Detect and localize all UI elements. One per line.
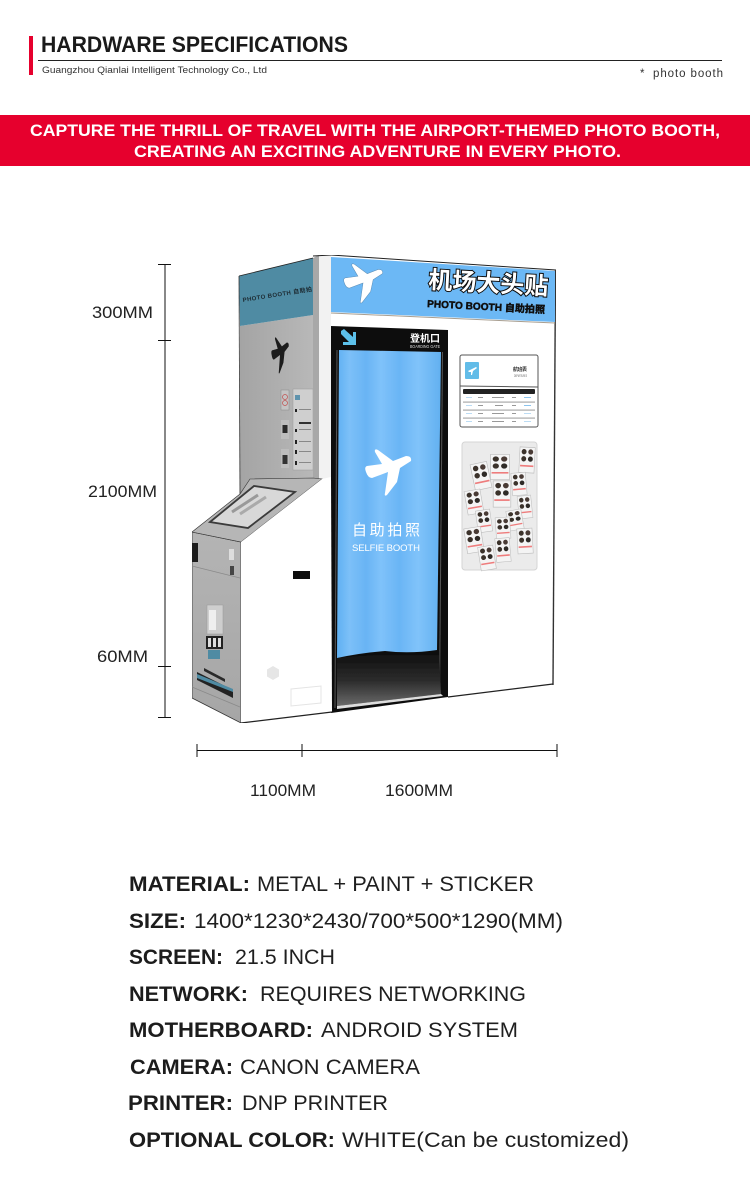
spec: printer: DNP PRINTER <box>242 1092 388 1115</box>
gate label: 登机口 <box>410 332 440 345</box>
sign subtitle: PHOTO BOOTH 自助拍照 <box>427 297 545 316</box>
sign title: 机场大头贴 <box>428 260 549 302</box>
board title: 航班表 <box>513 366 527 373</box>
spec: motherboard <box>129 1019 518 1042</box>
banner line 1: CAPTURE THE THRILL OF TRAVEL WITH THE AIRPORT-THEMED PHOTO BOOTH, <box>30 121 720 140</box>
kiosk label <box>291 686 321 706</box>
gate sublabel: BOARDING GATE <box>410 344 440 349</box>
board subtitle: DEPARTURES <box>514 374 527 378</box>
main booth front <box>331 255 556 713</box>
dimension label: 1100MM: 1100MM <box>250 781 316 800</box>
spec: motherboard: ANDROID SYSTEM <box>321 1019 518 1042</box>
curtain subtitle: SELFIE BOOTH <box>352 543 420 554</box>
spec: motherboard: MOTHERBOARD: <box>129 1019 313 1042</box>
company name: Guangzhou Qianlai Intelligent Technology Co., Ltd <box>42 65 267 75</box>
dimension label: 300MM: 300MM <box>92 303 153 322</box>
icon: black plane on side panel <box>271 337 289 373</box>
spec: optional color: WHITE(Can be customized) <box>342 1129 629 1152</box>
curtain title: 自助拍照 <box>352 522 420 539</box>
photo booth illustration <box>192 255 556 723</box>
door floor <box>337 650 441 706</box>
curtain <box>337 350 441 658</box>
spec: material: METAL + PAINT + STICKER <box>257 873 534 896</box>
spec: size: 1400*1230*2430/700*500*1290(MM) <box>194 910 563 933</box>
dimension label: 60MM: 60MM <box>97 647 148 666</box>
pillar <box>313 255 331 480</box>
spec: printer <box>128 1092 388 1115</box>
height dimension line <box>158 264 171 718</box>
width dimension line <box>197 744 557 757</box>
door frame <box>331 326 448 713</box>
side panel stickers <box>281 389 313 470</box>
heading: HARDWARE SPECIFICATIONS <box>41 32 348 57</box>
blue header sign <box>331 257 555 322</box>
side panel text: PHOTO BOOTH 自助拍 <box>242 285 312 304</box>
spec: material <box>129 873 534 896</box>
header: hardware specifications <box>29 32 723 80</box>
kiosk logo <box>267 666 279 680</box>
sample photo strips <box>464 447 535 571</box>
spec: camera: CAMERA: <box>130 1056 233 1079</box>
icon: header plane <box>344 264 383 303</box>
boarding gate door <box>331 326 448 713</box>
product tag: photo booth <box>653 68 723 80</box>
spec: camera: CANON CAMERA <box>240 1056 420 1079</box>
kiosk side details <box>192 543 240 707</box>
kiosk <box>192 477 332 723</box>
booth side panel <box>239 258 313 496</box>
icon: blue plane tile <box>465 362 479 379</box>
spec: optional color <box>129 1129 629 1152</box>
kiosk left face <box>192 532 241 723</box>
spec: optional color: OPTIONAL COLOR: <box>129 1129 335 1152</box>
spec: network: NETWORK: <box>129 983 248 1006</box>
spec: printer: PRINTER: <box>128 1092 233 1115</box>
spec: network <box>129 983 526 1006</box>
flight information board <box>460 355 538 427</box>
specification list <box>128 873 629 1152</box>
spec: size: SIZE: <box>129 910 186 933</box>
spec: screen <box>129 946 335 969</box>
red banner <box>0 115 750 166</box>
kiosk card slot <box>293 571 310 579</box>
icon: arrow <box>341 329 356 345</box>
photo display board <box>462 442 537 571</box>
spec: screen: SCREEN: <box>129 946 223 969</box>
icon: curtain plane <box>365 449 411 496</box>
spec: camera <box>130 1056 420 1079</box>
kiosk touch screen <box>210 486 295 528</box>
kiosk top slope <box>192 478 322 542</box>
board table <box>463 389 535 422</box>
red accent bar <box>29 36 33 75</box>
dimension label: 1600MM: 1600MM <box>385 781 453 800</box>
kiosk white front <box>241 477 332 723</box>
dimension label: 2100MM: 2100MM <box>88 482 157 501</box>
spec: material: MATERIAL: <box>129 873 250 896</box>
spec: screen: 21.5 INCH <box>235 946 335 969</box>
spec: network: REQUIRES NETWORKING <box>260 983 526 1006</box>
product tag: * <box>640 68 645 80</box>
banner line 2: CREATING AN EXCITING ADVENTURE IN EVERY PHOTO. <box>134 142 621 161</box>
